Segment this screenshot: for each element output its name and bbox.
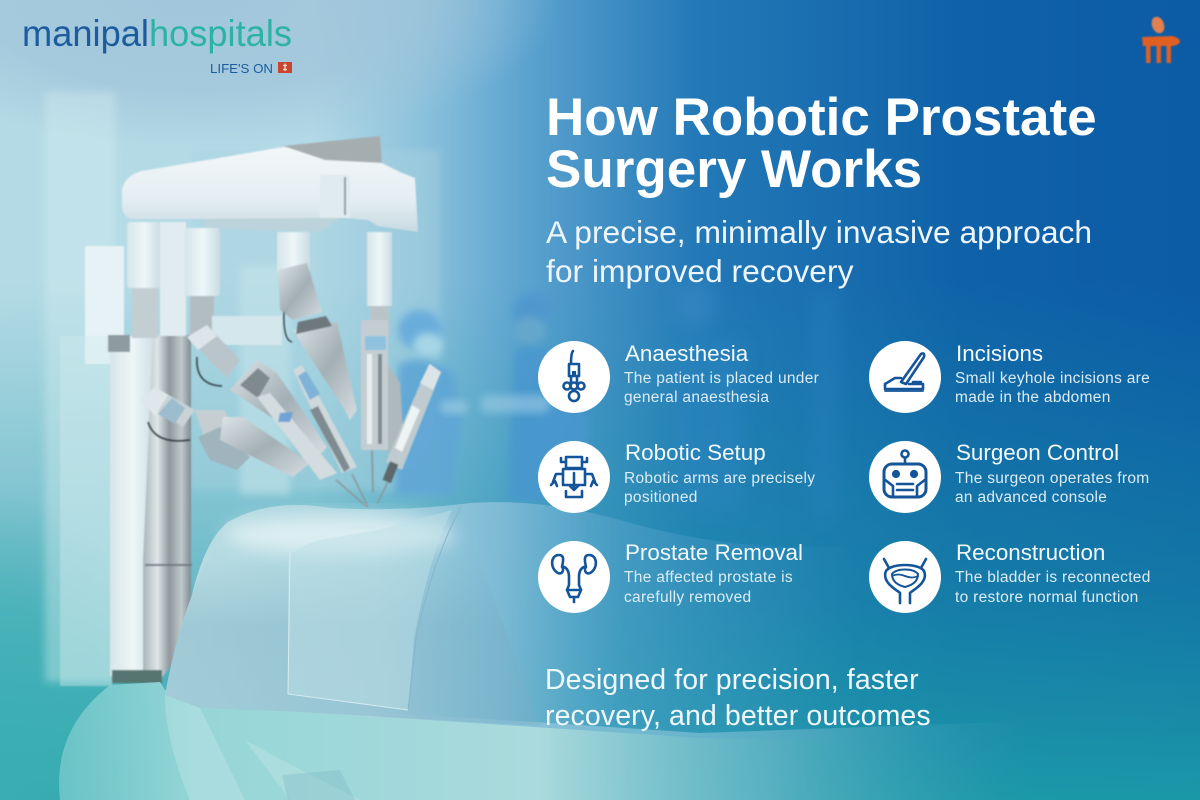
operating table: [59, 682, 1200, 800]
step: reconstruction: [869, 540, 1151, 613]
subtitle: A precise, minimally invasive approach: [546, 214, 1092, 250]
step: anaesthesia: [538, 341, 819, 413]
step: reconstruction: to restore normal function: [955, 589, 1139, 606]
step: robotic setup: Robotic arms are precisely: [624, 470, 815, 487]
icon: orange table mark: [1142, 15, 1180, 63]
logo: manipal hospitals: [22, 13, 292, 76]
step: reconstruction: The bladder is reconnected: [955, 569, 1151, 586]
step: prostate removal: carefully removed: [624, 589, 751, 606]
subtitle: for improved recovery: [546, 253, 854, 289]
step: prostate removal: The affected prostate is: [624, 569, 793, 586]
step: prostate removal: Prostate Removal: [625, 540, 803, 565]
robot: overhead boom: [122, 136, 418, 232]
closing statement: Designed for precision, faster: [545, 664, 919, 696]
icon: syringe: [564, 351, 584, 401]
patient drape: [165, 502, 860, 740]
arm: vertical tool: [361, 320, 404, 493]
closing statement: recovery, and better outcomes: [545, 700, 931, 732]
step: incisions: Small keyhole incisions are: [955, 370, 1150, 387]
step: robotic setup: [538, 440, 815, 513]
step: anaesthesia: general anaesthesia: [624, 389, 769, 406]
step: incisions: [869, 341, 1150, 413]
step: anaesthesia: Anaesthesia: [625, 341, 749, 366]
step: surgeon control: Surgeon Control: [956, 440, 1119, 465]
closing statement: [545, 664, 931, 732]
step: surgeon control: The surgeon operates from: [955, 470, 1149, 487]
step: robotic setup: positioned: [624, 489, 698, 506]
title: How Robotic Prostate: [546, 88, 1097, 147]
subtitle: [546, 214, 1092, 289]
arm: second: [187, 325, 367, 507]
drape centre sheet: [288, 510, 452, 710]
logo: manipal hospitals: LIFE'S ON: [210, 61, 273, 76]
step: anaesthesia: The patient is placed under: [624, 370, 819, 387]
step: surgeon control: an advanced console: [955, 489, 1107, 506]
arm: lower left: [140, 387, 310, 477]
step: reconstruction: Reconstruction: [956, 540, 1105, 565]
title: [546, 88, 1097, 199]
arm: slanted tool: [377, 364, 441, 504]
step: incisions: Incisions: [956, 341, 1043, 366]
step: robotic setup: Robotic Setup: [625, 440, 766, 465]
icon: robot head: [884, 450, 926, 497]
robot: support columns: [127, 222, 392, 345]
step: prostate removal: [538, 540, 803, 613]
arm: upper: [278, 263, 357, 420]
blurred surgical staff in background: [395, 279, 840, 520]
logo: manipal hospitals: manipalhospitals: [22, 13, 292, 54]
icon: robot with arms: [551, 457, 597, 497]
title: Surgery Works: [546, 140, 922, 199]
icon: scalpel: [885, 353, 924, 391]
step: incisions: made in the abdomen: [955, 389, 1111, 406]
icon: bladder: [884, 559, 926, 603]
arm: centre tool: [293, 365, 368, 507]
step: surgeon control: [869, 440, 1149, 513]
robot: tower and column: [60, 246, 192, 686]
icon: kidneys and prostate: [552, 555, 596, 602]
robot: surgical arms: [140, 263, 441, 507]
